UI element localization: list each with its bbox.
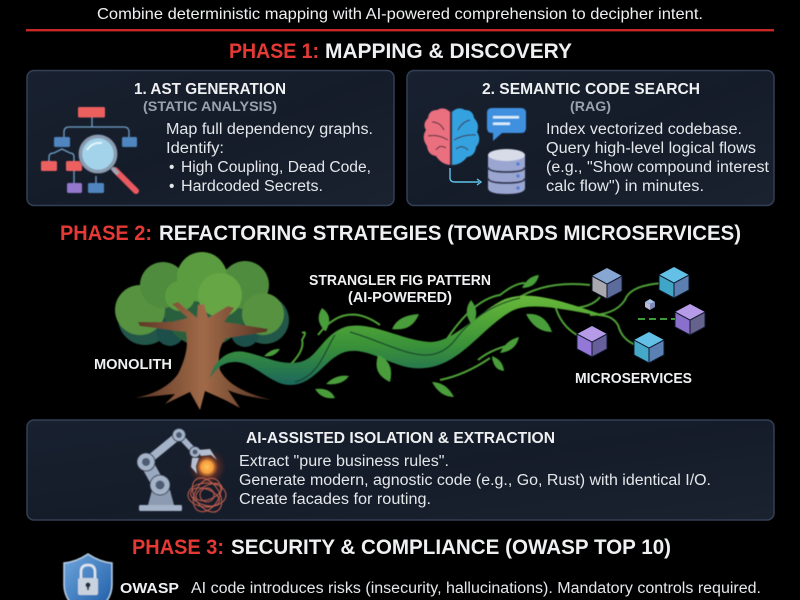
icon: robot arm — [137, 428, 217, 511]
text block: semantic search description: Query high-level logical flows — [546, 140, 756, 157]
panel: AI-assisted isolation and extraction — [27, 420, 774, 520]
text block: AST description: High Coupling, Dead Code, — [181, 159, 371, 176]
icon: tangled code ball — [186, 473, 228, 517]
text block: AST description: Hardcoded Secrets. — [181, 178, 323, 195]
heading: phase 2: PHASE 2: — [60, 222, 152, 245]
label: strangler fig pattern: STRANGLER FIG PATTERN — [309, 273, 491, 289]
icon: dependency graph with magnifier — [41, 107, 137, 193]
label: strangler fig pattern — [309, 273, 491, 306]
label: strangler fig pattern: (AI-POWERED) — [348, 290, 452, 306]
tree roots and trunk — [135, 302, 272, 410]
panel subtitle: RAG: (RAG) — [570, 98, 611, 114]
microservices cubes — [577, 267, 705, 363]
heading: phase 3: PHASE 3: — [132, 536, 224, 559]
heading: phase 1: PHASE 1: — [229, 40, 319, 63]
text block: semantic search description: (e.g., "Show compound interest — [546, 159, 770, 176]
icon: shield with lock — [64, 554, 112, 600]
icon: chat bubble — [487, 108, 526, 141]
text block: AST description: • — [169, 178, 174, 195]
heading: phase 2: REFACTORING STRATEGIES (TOWARDS MICROSERVICES) — [159, 222, 741, 245]
text block: extraction description — [239, 453, 711, 508]
text: OWASP label: OWASP — [120, 581, 179, 597]
icon: glowing core — [187, 447, 227, 487]
label: microservices: MICROSERVICES — [575, 371, 692, 387]
panel: semantic code search — [407, 70, 774, 206]
panel title: AST generation: 1. AST GENERATION — [134, 81, 286, 98]
icon: database — [488, 149, 525, 194]
illustration: strangler vine — [210, 275, 664, 398]
text block: semantic search description: calc flow") in minutes. — [546, 178, 704, 195]
text block: AST description — [166, 121, 373, 195]
text block: extraction description: Extract "pure business rules". — [239, 453, 449, 470]
text block: extraction description: Generate modern, agnostic code (e.g., Go, Rust) with identical I/O. — [239, 472, 711, 489]
panel title: isolation and extraction: AI-ASSISTED ISOLATION & EXTRACTION — [246, 430, 555, 447]
subtitle: Combine deterministic mapping with AI-powered comprehension to decipher intent. — [97, 6, 703, 23]
text: security note: AI code introduces risks (insecurity, hallucinations). Mandatory controls required. — [191, 580, 761, 597]
vine leaves — [264, 275, 552, 398]
text block: AST description: Identify: — [166, 140, 224, 157]
heading: phase 1: MAPPING & DISCOVERY — [325, 40, 572, 63]
panel: AST generation — [27, 70, 394, 206]
text block: semantic search description — [546, 121, 770, 195]
text block: semantic search description: Index vectorized codebase. — [546, 121, 742, 138]
heading: phase 3: SECURITY & COMPLIANCE (OWASP TOP 10) — [231, 536, 671, 559]
arrow: brain to database — [450, 168, 481, 185]
illustration: monolith tree — [115, 252, 289, 410]
text block: AST description: • — [169, 159, 174, 176]
icon: brain — [424, 108, 479, 165]
label: monolith: MONOLITH — [94, 357, 172, 373]
tree canopy — [115, 252, 289, 347]
text block: AST description: Map full dependency graphs. — [166, 121, 373, 138]
panel title: semantic code search: 2. SEMANTIC CODE SEARCH — [482, 81, 700, 98]
text block: extraction description: Create facades for routing. — [239, 491, 431, 508]
panel subtitle: static analysis: (STATIC ANALYSIS) — [143, 98, 277, 114]
